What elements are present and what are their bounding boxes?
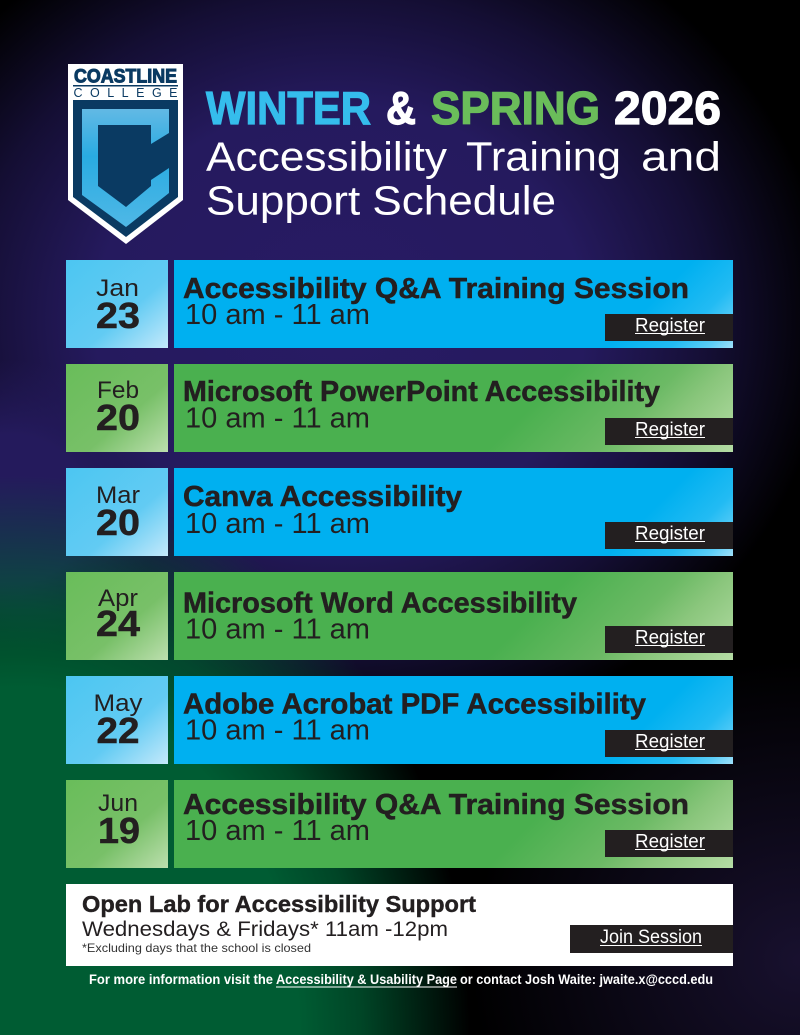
subtitle bbox=[206, 134, 721, 224]
session panel: Accessibility Q&A Training Session: 10 am - 11 am bbox=[185, 815, 370, 847]
session row: May 22 bbox=[66, 676, 733, 764]
date box: May 22: May bbox=[94, 690, 142, 717]
session panel: Adobe Acrobat PDF Accessibility: Adobe Acrobat PDF Accessibility bbox=[183, 688, 646, 720]
session row: Apr 24 bbox=[66, 572, 733, 660]
date box: Jun 19: Jun bbox=[98, 790, 138, 817]
panel: open lab bbox=[66, 884, 733, 966]
session panel: Canva Accessibility bbox=[174, 468, 733, 556]
logo: Coastline College shield bbox=[68, 64, 183, 244]
session panel: Microsoft PowerPoint Accessibility: Microsoft PowerPoint Accessibility bbox=[183, 376, 660, 408]
title: Winter & Spring 2026: 2026 bbox=[614, 82, 721, 134]
session panel: Canva Accessibility: Canva Accessibility bbox=[183, 481, 462, 513]
date box: Jun 19: 19 bbox=[98, 810, 140, 851]
date box: Mar 20 bbox=[66, 468, 168, 556]
open lab hours: Wednesdays & Fridays* 11am -12pm bbox=[82, 918, 448, 941]
session panel: Accessibility Q&A Training Session: Accessibility Q&A Training Session bbox=[183, 273, 689, 305]
date box: Jan 23: 23 bbox=[96, 295, 140, 336]
button: Register: Register bbox=[635, 732, 706, 752]
button: Register: Register bbox=[635, 316, 706, 336]
logo: Coastline College shield: COLLEGE bbox=[74, 86, 178, 100]
date box: Jan 23: Jan bbox=[96, 275, 139, 302]
session panel: Adobe Acrobat PDF Accessibility bbox=[174, 676, 733, 764]
button: Join Session: Join Session bbox=[600, 927, 702, 948]
date box: Feb 20: Feb bbox=[97, 377, 139, 404]
title: Winter & Spring 2026: WINTER bbox=[206, 82, 371, 134]
session row: Jun 19 bbox=[66, 780, 733, 868]
date box: Mar 20: Mar bbox=[96, 482, 140, 509]
subtitle: and bbox=[641, 134, 721, 180]
button: Register bbox=[605, 418, 733, 445]
button: Register bbox=[605, 314, 733, 341]
date box: Mar 20: 20 bbox=[96, 502, 140, 543]
button: Register: Register bbox=[635, 420, 706, 440]
title: Winter & Spring 2026: & bbox=[386, 82, 416, 134]
title: Winter & Spring 2026 bbox=[206, 82, 721, 134]
footer contact line: or contact Josh Waite: jwaite.x@cccd.edu bbox=[460, 972, 713, 987]
date box: May 22 bbox=[66, 676, 168, 764]
session row: Feb 20 bbox=[66, 364, 733, 452]
logo: Coastline College shield: COASTLINE bbox=[74, 66, 177, 88]
session panel: Canva Accessibility: 10 am - 11 am bbox=[185, 508, 370, 540]
session row: Jan 23 bbox=[66, 260, 733, 348]
session panel: Microsoft Word Accessibility bbox=[174, 572, 733, 660]
open lab heading: Open Lab for Accessibility Support bbox=[82, 891, 476, 917]
button: Register: Register bbox=[635, 524, 706, 544]
session panel: Microsoft PowerPoint Accessibility bbox=[174, 364, 733, 452]
button: Register: Register bbox=[635, 832, 706, 852]
footer contact line: Accessibility & Usability Page bbox=[276, 972, 457, 987]
session panel: Accessibility Q&A Training Session: 10 am - 11 am bbox=[185, 299, 370, 331]
date box: May 22: 22 bbox=[96, 710, 140, 751]
date box: Apr 24: 24 bbox=[96, 603, 140, 644]
session panel: Microsoft PowerPoint Accessibility: 10 am - 11 am bbox=[185, 402, 370, 434]
date box: Apr 24 bbox=[66, 572, 168, 660]
session panel: Adobe Acrobat PDF Accessibility: 10 am - 11 am bbox=[185, 714, 370, 746]
footer contact line bbox=[89, 972, 713, 988]
footer contact line: For more information visit the bbox=[89, 972, 273, 987]
subtitle: Training bbox=[466, 134, 621, 180]
session panel: Accessibility Q&A Training Session bbox=[174, 260, 733, 348]
date box: Jun 19 bbox=[66, 780, 168, 868]
subtitle: Support Schedule bbox=[206, 178, 556, 224]
button: Register bbox=[605, 626, 733, 653]
button: Join Session bbox=[570, 925, 733, 953]
session row: Mar 20 bbox=[66, 468, 733, 556]
button: Register bbox=[605, 830, 733, 857]
subtitle: Accessibility bbox=[206, 134, 448, 180]
session panel: Microsoft Word Accessibility: 10 am - 11 am bbox=[185, 614, 370, 646]
date box: Feb 20: 20 bbox=[96, 397, 140, 438]
title: Winter & Spring 2026: SPRING bbox=[431, 82, 600, 134]
button: Register bbox=[605, 730, 733, 757]
button: Register: Register bbox=[635, 628, 706, 648]
session panel: Accessibility Q&A Training Session: Accessibility Q&A Training Session bbox=[183, 789, 689, 821]
open lab note: *Excluding days that the school is closed bbox=[82, 941, 311, 955]
button: Register bbox=[605, 522, 733, 549]
session panel: Accessibility Q&A Training Session bbox=[174, 780, 733, 868]
session panel: Microsoft Word Accessibility: Microsoft Word Accessibility bbox=[183, 588, 577, 620]
date box: Jan 23 bbox=[66, 260, 168, 348]
date box: Feb 20 bbox=[66, 364, 168, 452]
date box: Apr 24: Apr bbox=[98, 585, 138, 612]
